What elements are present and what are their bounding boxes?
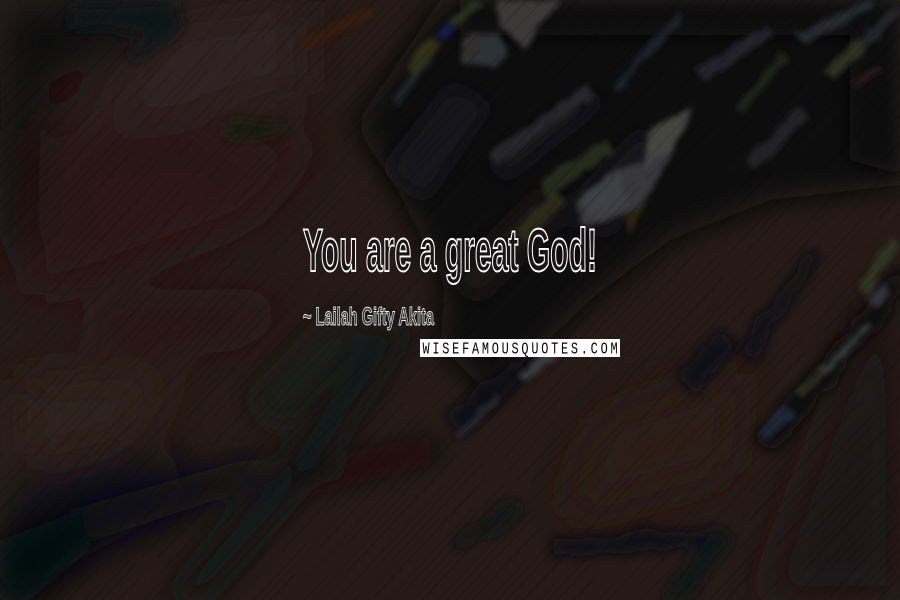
brush bristle bands: [300, 0, 900, 442]
broad mid-tone bands inside the dark mass: [385, 0, 900, 300]
watermark badge: WISEFAMOUSQUOTES.COM: [422, 341, 620, 359]
author attribution: ~ Lailah Gifty Akita: [303, 303, 435, 331]
title quote: You are a great God!: [303, 217, 597, 284]
